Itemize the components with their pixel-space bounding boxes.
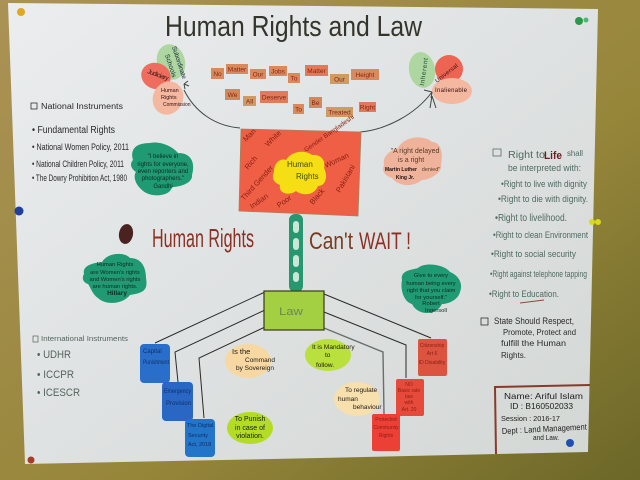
quote blob: Robert Ingersoll: human being every	[406, 281, 456, 287]
slogan word tiles	[211, 64, 379, 117]
quote blob: Robert Ingersoll: Robert	[422, 301, 440, 307]
blue tile: capital punishment: Punishment	[143, 360, 169, 366]
blue tile: digital security act: Act, 2018	[188, 442, 211, 448]
left petal cluster: Rights	[161, 95, 177, 101]
centre red box: Black	[308, 186, 326, 206]
international instruments list: • ICESCR	[37, 387, 80, 399]
right to life panel: •Right to clean Environment	[493, 230, 588, 240]
slogan word tiles: To	[295, 106, 302, 114]
note: mandatory to follow	[305, 339, 355, 371]
international instruments list	[33, 336, 129, 399]
left petal cluster: Schools	[163, 53, 177, 79]
quote blob: Gandhi: Gandhi	[153, 184, 173, 190]
right petal cluster	[406, 50, 472, 104]
right to life panel: •Right against telephone tapping	[490, 269, 587, 280]
left petal cluster: Commission	[163, 102, 191, 108]
blue tile: digital security act: Security	[188, 433, 208, 439]
right to life panel: •Right to livelihood.	[495, 213, 567, 224]
quote blob: Hillary: and Women's rights	[90, 277, 141, 283]
student info box: ID : B160502033	[510, 401, 573, 411]
note: command by sovereign: Is the	[232, 347, 250, 356]
red tile: no taxation: with	[405, 400, 414, 406]
slogan word tiles: We	[228, 92, 238, 99]
left petal cluster: Human	[161, 88, 179, 94]
note: mandatory to follow: to	[325, 352, 331, 359]
note: command by sovereign	[225, 344, 275, 378]
right to life panel: •Right to die with dignity.	[498, 194, 588, 205]
right to life panel	[489, 148, 588, 303]
left petal cluster: Judiciary	[146, 68, 170, 83]
slogan right	[309, 228, 411, 255]
slogan word tiles: Right	[360, 104, 375, 112]
quote blob: Martin Luther King: is a right	[398, 157, 424, 164]
arcs from petals to centre box	[184, 81, 436, 132]
slogan word tiles: Jobs	[271, 68, 286, 76]
note: mandatory to follow: It is Mandatory	[312, 344, 355, 351]
slogan word tiles: All	[246, 98, 254, 106]
quote blob: Hillary: Human Rights	[97, 262, 133, 268]
left petal cluster	[137, 41, 191, 120]
blue tile: digital security act: The Digital	[187, 423, 213, 429]
quote blob: Martin Luther King: Martin Luther	[385, 167, 417, 173]
state duties note: Rights.	[501, 350, 526, 360]
quote blob: Hillary	[83, 254, 146, 303]
quote blob: Gandhi: rights for everyone,	[137, 162, 189, 168]
right to life panel: •Right to social security	[491, 249, 576, 260]
centre red box: Gender Bangladeshi	[303, 114, 356, 154]
slogan word tiles: Matter	[228, 66, 247, 74]
red tile: no taxation: Basic rate	[398, 388, 420, 394]
slogan word tiles: Treated	[328, 110, 351, 116]
note: to punish	[227, 412, 273, 444]
blue tile: capital punishment: Capital	[143, 349, 162, 355]
slogan word tiles: No	[213, 71, 222, 78]
note: regulate behaviour: behaviour	[353, 404, 382, 411]
dark oval bullet	[117, 223, 135, 245]
red tile: no taxation: law	[405, 394, 413, 400]
blue tile: emergency provision: Provision	[166, 401, 191, 407]
state duties note: Promote, Protect and	[503, 327, 576, 337]
centre red box	[239, 114, 361, 216]
red tile: protected community rights: Rights	[379, 433, 394, 439]
red tile: protected community rights	[372, 414, 400, 451]
note: to punish: To Punish	[235, 416, 265, 423]
slogan left: Human Rights	[152, 223, 254, 253]
centre red box: Third Gender	[239, 163, 275, 202]
note: regulate behaviour: To regulate	[345, 387, 378, 394]
note: command by sovereign: Command	[245, 357, 275, 364]
red tile: citizenship: Citizenship	[420, 343, 444, 349]
blue tile: digital security act	[185, 419, 215, 457]
student info box: Dept : Land Management	[502, 422, 588, 436]
blue tile: emergency provision	[162, 382, 193, 421]
red tile: citizenship: Art 6	[427, 351, 437, 357]
red tile: protected community rights: Protected	[375, 417, 397, 423]
red tile: no taxation	[396, 379, 424, 416]
quote blob: Gandhi: even reporters and	[138, 169, 188, 175]
national instruments list: • National Women Policy, 2011	[32, 142, 129, 153]
slogan word tiles: To	[291, 76, 298, 82]
slogan right: WAIT !	[359, 228, 411, 255]
right to life panel: shall	[567, 148, 583, 158]
right petal cluster: Inalienable	[435, 88, 468, 94]
note: command by sovereign: by Sovereign	[236, 365, 274, 372]
national instruments list: • National Children Policy, 2011	[32, 159, 124, 169]
blue tile: emergency provision: Emergency	[164, 389, 191, 395]
centre red box: Pakistani	[334, 163, 357, 194]
state duties note: fulfill the Human	[501, 338, 566, 348]
student info box: Session : 2016-17	[501, 414, 560, 423]
quote blob: Gandhi: "I believe in	[148, 154, 178, 160]
centre red box: Rights	[296, 172, 319, 181]
centre red box: White	[263, 128, 283, 148]
quote blob: Robert Ingersoll: for yourself."	[415, 295, 447, 301]
centre red box: Woman	[323, 151, 350, 170]
international instruments list: • UDHR	[37, 349, 71, 361]
quote blob: Robert Ingersoll: right that you claim	[407, 288, 455, 294]
state duties note: State Should Respect,	[494, 316, 574, 326]
quote blob: Robert Ingersoll: Give to every	[414, 273, 448, 279]
slogan word tiles: Matter	[307, 68, 327, 75]
centre red box: Rich	[243, 154, 259, 171]
national instruments list: National Instruments	[41, 102, 123, 111]
quote blob: Martin Luther King	[383, 137, 442, 185]
connector lines from law box	[155, 292, 431, 418]
slogan word tiles: Height	[356, 72, 375, 79]
law box	[264, 291, 324, 330]
right to life panel: •Right to Education.	[489, 289, 559, 300]
slogan word tiles: Our	[334, 76, 346, 84]
quote blob: Martin Luther King: King Jr.	[396, 175, 415, 181]
blue tile: capital punishment	[140, 344, 170, 383]
note: to punish: in case of	[235, 425, 265, 432]
red tile: protected community rights: Community	[373, 425, 399, 431]
red tile: no taxation: NO	[405, 382, 413, 388]
national instruments list	[31, 102, 129, 183]
right to life panel: •Right to live with dignity	[501, 179, 587, 190]
centre red box: Poor	[275, 193, 294, 210]
national instruments list: • Fundamental Rights	[32, 125, 115, 136]
slogan word tiles: Deserve	[262, 94, 286, 102]
quote blob: Martin Luther King: denied"	[422, 167, 440, 173]
right to life panel: Life	[544, 150, 562, 162]
international instruments list: International Instruments	[41, 336, 129, 343]
student info box	[495, 385, 590, 454]
note: mandatory to follow: follow.	[316, 362, 334, 369]
quote blob: Hillary: are human rights.	[92, 284, 138, 290]
note: to punish: violation.	[236, 433, 264, 440]
chain connector	[289, 214, 303, 292]
slogan word tiles: Be	[312, 100, 320, 107]
quote blob: Gandhi: photographers."	[142, 176, 184, 182]
red tile: no taxation: Art. 20	[402, 407, 417, 413]
international instruments list: • ICCPR	[37, 369, 74, 381]
student info box: Name: Ariful Islam	[504, 391, 583, 401]
state duties note	[481, 316, 576, 360]
right petal cluster: Universal	[435, 63, 460, 85]
right to life panel: be interpreted with:	[508, 163, 581, 173]
centre red box: Indian	[248, 192, 270, 211]
law box: Law	[279, 306, 303, 318]
quote blob: Robert Ingersoll: Ingersoll	[425, 308, 447, 314]
quote blob: Robert Ingersoll	[401, 265, 461, 314]
left petal cluster: Subordinate	[170, 45, 187, 80]
centre red box: Human	[287, 160, 313, 169]
title: Human Rights and Law	[165, 11, 423, 43]
quote blob: Gandhi	[131, 143, 193, 195]
quote blob: Martin Luther King: "A right delayed	[391, 148, 440, 155]
quote blob: Hillary: are Women's rights	[90, 270, 140, 276]
note: regulate behaviour	[334, 382, 382, 416]
student info box: and Law.	[533, 433, 559, 442]
national instruments list: • The Dowry Prohibition Act, 1980	[32, 173, 127, 183]
note: regulate behaviour: human	[338, 396, 358, 403]
slogan right: Can't	[309, 228, 353, 255]
quote blob: Hillary: Hillary	[107, 290, 127, 297]
red tile: citizenship	[418, 339, 447, 376]
centre red box: Man	[241, 127, 258, 143]
slogan word tiles: Our	[253, 72, 264, 78]
right petal cluster: Inherent	[419, 57, 430, 86]
right to life panel: Right to	[508, 149, 545, 161]
red tile: citizenship: ID Disability	[419, 360, 446, 366]
